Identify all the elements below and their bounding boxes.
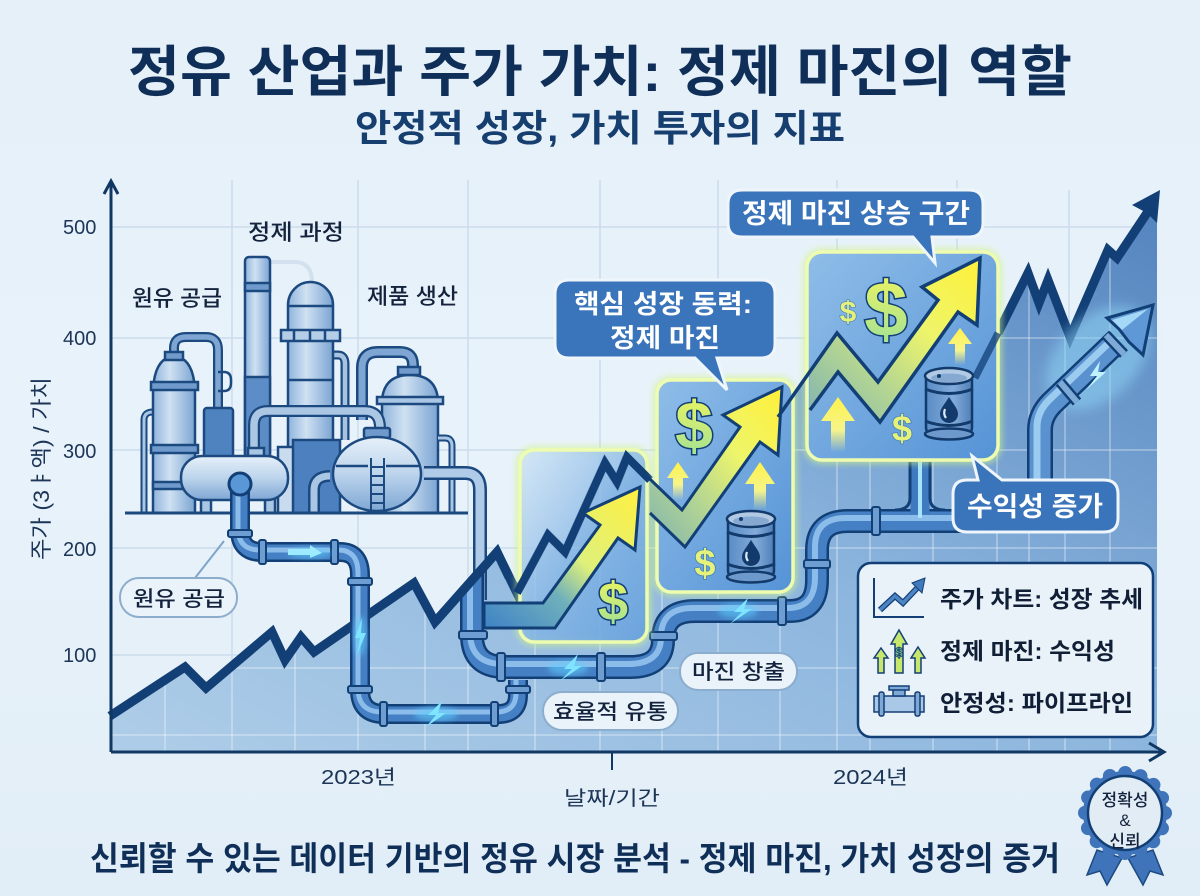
margin zone 1 [484,450,650,642]
title: 정유 산업과 주가 가치: 정제 마진의 역할 [128,41,1072,103]
rising pipe with arrow [1026,286,1170,490]
refinery background pipes [144,262,413,513]
barrel [925,368,973,440]
pill: crude supply [120,541,237,617]
refinery label: crude supply: 원유 공급 [132,286,222,311]
faint stock line behind barrel [975,333,998,378]
energy sparks [288,361,1106,727]
y axis tick labels: 400 [63,328,96,350]
refinery tall stack [245,257,270,457]
crude oil pipeline [228,473,530,726]
dollar sign: $ [598,572,628,632]
x axis labels: 2024년 [833,766,908,789]
background grid [111,180,1157,752]
y axis tick labels: 200 [63,539,96,561]
refinery outlet pipe [424,473,480,600]
y axis tick labels [63,217,96,667]
pill: margin creation [680,653,797,690]
main margin pipeline [435,462,1020,681]
refinery main column [281,282,340,460]
arrow 1 [484,487,640,628]
rejoined stock line inside zone 1 [517,457,650,593]
trust badge: 신뢰 [1109,832,1141,851]
y axis tick labels: 300 [63,441,96,463]
margin zone 3: $ [892,408,912,449]
y axis title: 주가 (3ㅑ액) / 가치 [29,377,54,560]
callout: core growth driver: 정제 마진 [610,323,720,353]
legend icon: margin arrows [874,630,925,673]
stock price line [110,190,1160,716]
trust badge: & [1119,811,1131,830]
callout: margin rising section [728,190,983,263]
legend text: margin: 정제 마진: 수익성 [940,638,1115,664]
subtitle: 안정적 성장, 가치 투자의 지표 [355,108,845,149]
pipe collars [228,530,530,726]
refinery lower pipes [314,476,330,513]
legend text: chart: 주가 차트: 성장 추세 [940,586,1143,612]
barrel [727,511,775,582]
legend icon: pipeline [874,686,924,716]
refinery illustration [125,257,480,600]
pill: crude supply: 원유 공급 [133,588,225,611]
y axis tick labels: 100 [63,645,96,667]
margin zone 2 [627,380,793,592]
margin zone 3: $ [840,296,857,329]
legend icon: margin arrows: $ [895,644,903,660]
x axis labels: 2023년 [321,766,396,789]
legend panel [858,563,1153,737]
margin zone 2: $ [694,543,716,585]
callout: profitability up [953,456,1118,532]
refinery left column [151,352,233,513]
trust badge: 정확성 [1102,791,1148,810]
pill: efficient distribution [543,692,678,730]
main pipe collars [459,507,880,681]
trust badge [1083,771,1167,885]
refinery label: process: 정제 과정 [248,220,344,245]
callout: core growth driver: 핵심 성장 동력: [574,289,752,319]
y axis tick labels: 500 [63,217,96,239]
stock line segment over pipe [435,552,509,622]
margin zone 3 [778,252,998,460]
branch pipe up to margin zone [895,462,945,518]
legend icon: stock chart [874,578,925,617]
refinery spherical tank [333,428,421,513]
refinery ground line [125,512,468,514]
up arrows [667,462,775,510]
legend text: pipeline: 안정성: 파이프라인 [940,690,1133,716]
refinery label: product: 제품 생산 [367,284,458,309]
x axis labels: 날짜/기간 [564,787,660,810]
pill: efficient distribution: 효율적 유통 [553,701,668,724]
callout: profitability up: 수익성 증가 [967,492,1103,522]
x and y axes [104,181,1164,770]
x axis labels [321,766,908,810]
pipe inlet ring [229,473,251,495]
refinery back crossing pipe [254,411,380,450]
up arrows [821,328,972,452]
arrow 3 [810,258,980,422]
refinery central block [278,440,340,513]
stock price chart area [110,180,1157,752]
arrow 2 [650,387,782,547]
refinery right column [377,367,452,513]
pill: margin creation: 마진 창출 [692,661,785,684]
refinery horizontal tank [181,448,288,513]
dollar signs: $ [675,388,713,464]
callout: margin rising section: 정제 마진 상승 구간 [742,199,970,229]
callout: core growth driver [555,280,775,390]
dollar signs: $ [864,265,908,353]
footer statement: 신뢰할 수 있는 데이터 기반의 정유 시장 분석 - 정제 마진, 가치 성장의 증거 [90,840,1060,877]
